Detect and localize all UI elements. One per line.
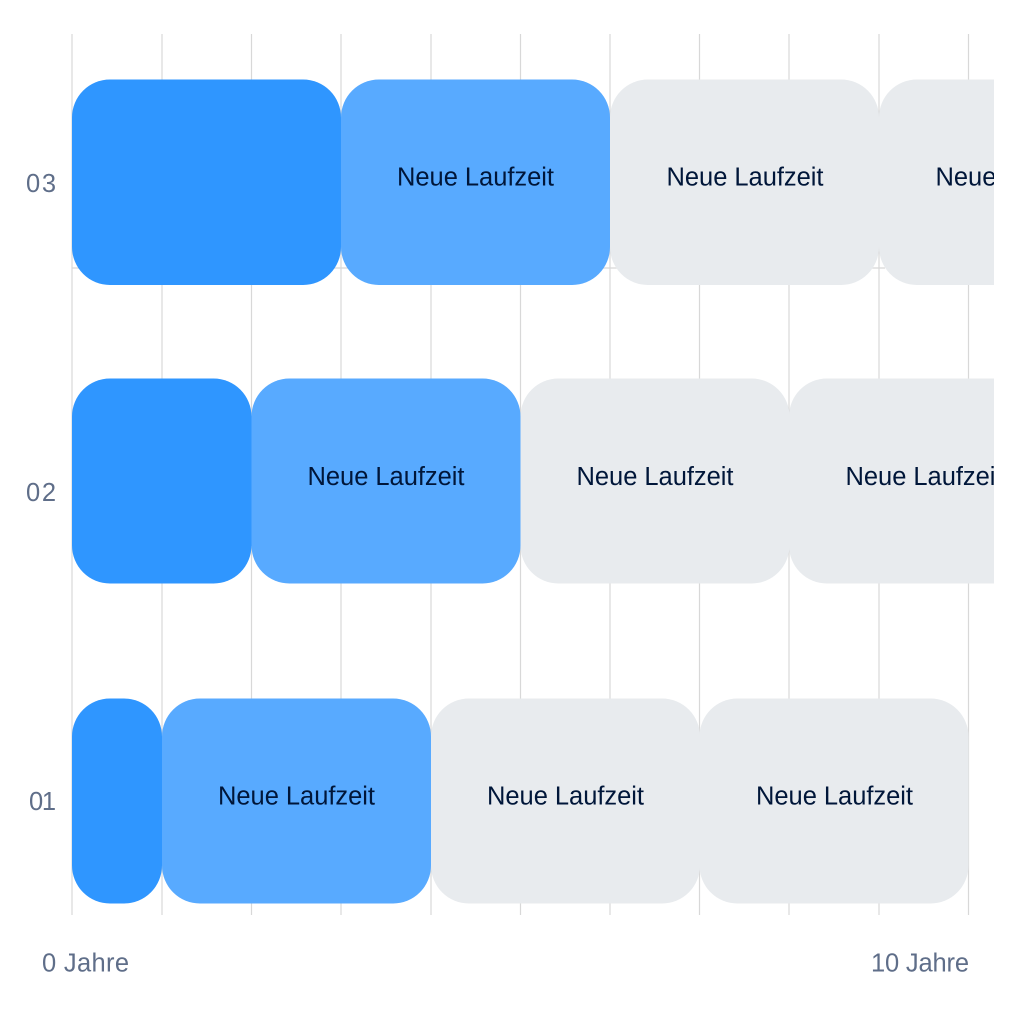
row 02 renewal grey 2: Neue Laufzeit <box>846 463 1002 491</box>
row 02 initial term <box>72 378 252 584</box>
row 03 renewal light blue: Neue Laufzeit <box>397 164 554 192</box>
row 03 renewal grey 1: Neue Laufzeit <box>666 164 824 192</box>
row 02 renewal grey 1 <box>520 378 790 584</box>
row 01 initial term <box>72 698 162 904</box>
row 02 renewal grey 2 <box>790 378 994 584</box>
row 03 renewal grey 1 <box>610 80 879 285</box>
row 03 bars <box>72 80 1024 285</box>
row 03 renewal light blue <box>341 80 610 285</box>
axis label start: 0 Jahre <box>42 950 129 978</box>
row 01 bars <box>72 698 968 904</box>
axis label end: 10 Jahre <box>871 950 969 978</box>
row 02 renewal light blue: Neue Laufzeit <box>308 463 464 491</box>
row 01 renewal light blue: Neue Laufzeit <box>218 782 375 810</box>
row label 01: 01 <box>29 788 56 816</box>
row 01 renewal grey 2: Neue Laufzeit <box>756 782 913 810</box>
row label 02: 02 <box>26 479 56 507</box>
row 03 renewal grey 2 <box>879 80 994 285</box>
row 02 renewal light blue <box>252 378 520 584</box>
row 01 renewal grey 1 <box>431 698 700 904</box>
row 01 renewal grey 1: Neue Laufzeit <box>487 782 644 810</box>
row 03 initial term <box>72 80 341 285</box>
row label 03: 03 <box>26 170 56 198</box>
row 01 renewal grey 2 <box>700 698 968 904</box>
row 02 renewal grey 1: Neue Laufzeit <box>576 463 734 491</box>
row 02 bars <box>72 378 1024 584</box>
row 01 renewal light blue <box>162 698 431 904</box>
